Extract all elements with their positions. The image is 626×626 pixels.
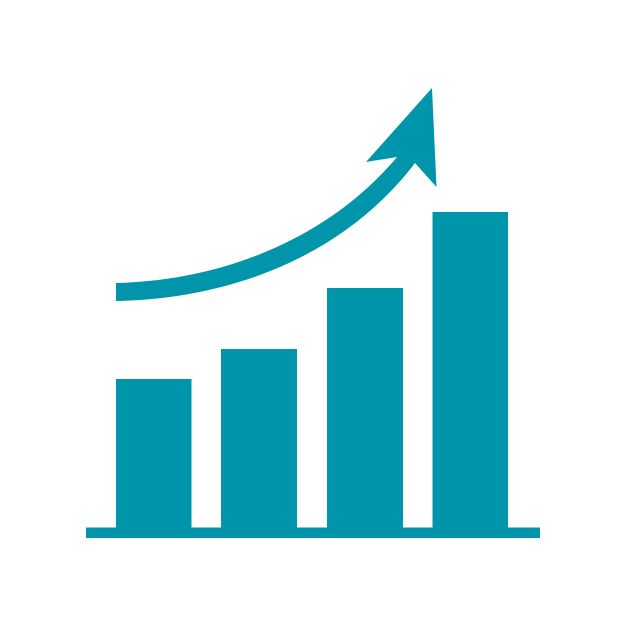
bar chart	[86, 212, 540, 538]
bar 2	[221, 349, 297, 529]
bar 1	[116, 379, 192, 529]
bar 3	[327, 288, 403, 529]
arrow: rising trend	[116, 88, 436, 301]
bar 4	[432, 212, 508, 529]
baseline	[86, 528, 540, 538]
